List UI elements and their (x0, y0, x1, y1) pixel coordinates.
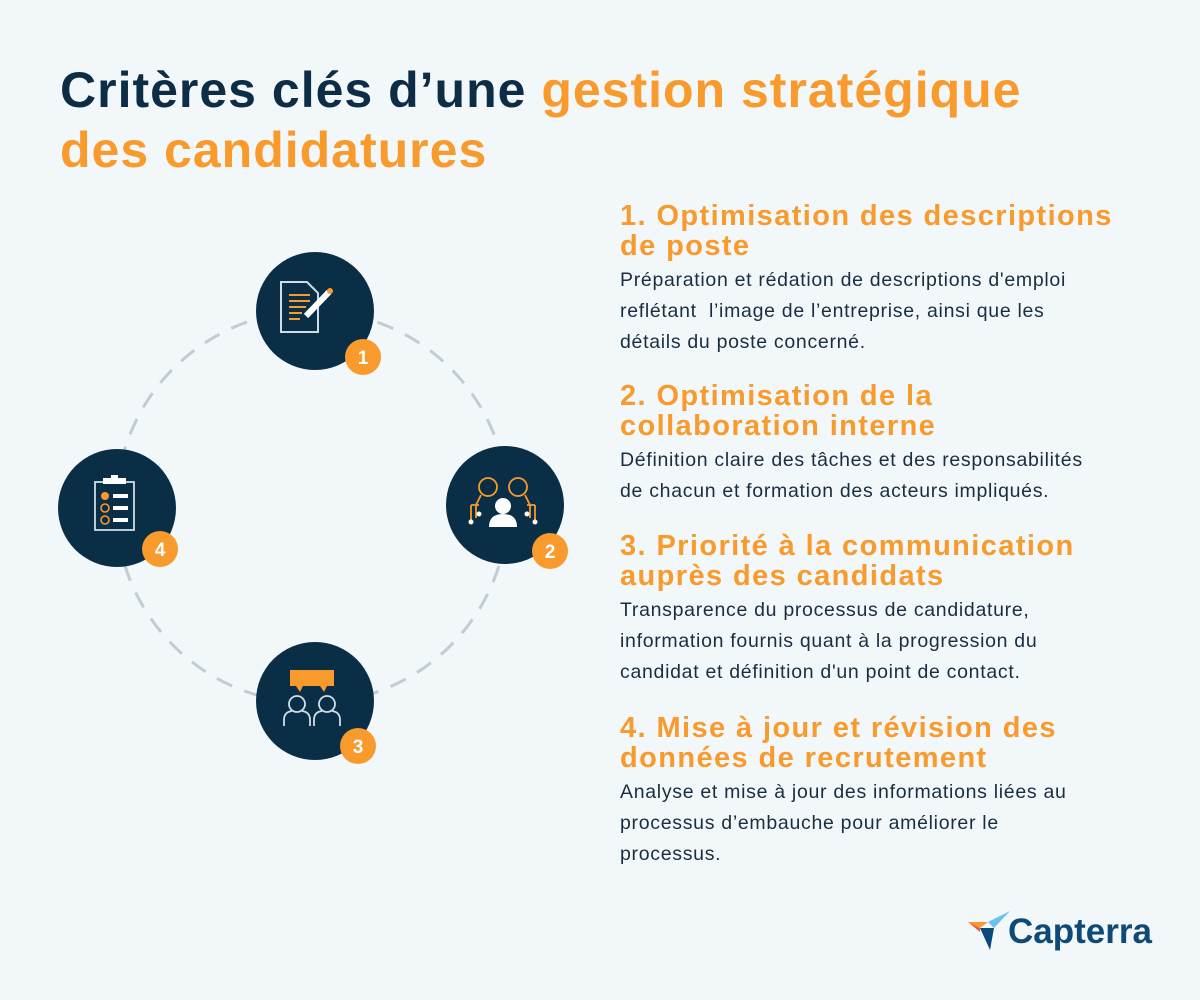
icon: checklist step 4 (58, 449, 178, 567)
logo: Capterra: Capterra (1008, 912, 1152, 951)
item 1: détails du poste concerné. (620, 331, 866, 353)
icon: team step 2 (446, 446, 568, 569)
icon: document step 1 (256, 252, 381, 375)
item 2: de chacun et formation des acteurs impliqués. (620, 480, 1049, 502)
item 2: 2. Optimisation de la (620, 380, 933, 412)
item 3: 3. Priorité à la communication (620, 530, 1075, 562)
item 4 (620, 712, 1067, 865)
icon: team step 2: 2 (545, 542, 555, 563)
title: Critères clés d’une gestion stratégique (60, 62, 1022, 118)
item 4: données de recrutement (620, 742, 988, 774)
item 1: de poste (620, 230, 750, 262)
item 4: processus. (620, 843, 721, 865)
item 3 (620, 530, 1075, 683)
icon: conversation step 3: 3 (353, 737, 363, 758)
item 4: processus d’embauche pour améliorer le (620, 812, 999, 834)
title (60, 62, 1022, 178)
item 1 (620, 200, 1113, 353)
item 1: 1. Optimisation des descriptions (620, 200, 1113, 232)
item 3: auprès des candidats (620, 560, 945, 592)
icon: checklist step 4: 4 (155, 540, 166, 561)
item 3: information fournis quant à la progression du (620, 630, 1037, 652)
icon: conversation step 3 (256, 642, 376, 764)
icon: document step 1: 1 (358, 348, 369, 369)
item 3: candidat et définition d'un point de contact. (620, 661, 1021, 683)
item 1: reflétant l’image de l’entreprise, ainsi que les (620, 300, 1045, 322)
item 4: 4. Mise à jour et révision des (620, 712, 1057, 744)
title: des candidatures (60, 122, 487, 178)
item 2: collaboration interne (620, 410, 936, 442)
item 4: Analyse et mise à jour des informations liées au (620, 781, 1067, 803)
item 2 (620, 380, 1083, 502)
item 1: Préparation et rédation de descriptions d'emploi (620, 269, 1066, 291)
item 2: Définition claire des tâches et des responsabilités (620, 449, 1083, 471)
item 3: Transparence du processus de candidature, (620, 599, 1030, 621)
cycle diagram (58, 252, 568, 764)
